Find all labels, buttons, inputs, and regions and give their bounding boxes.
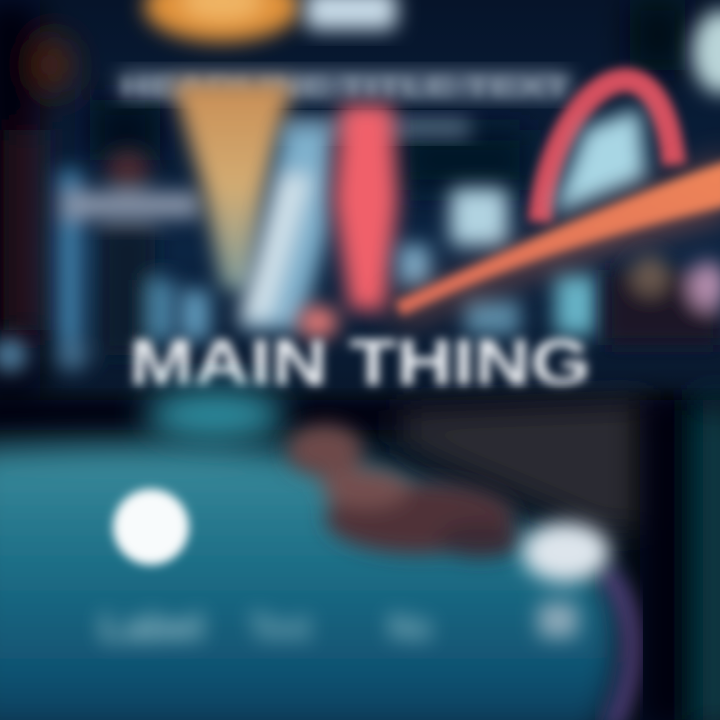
black right column — [640, 400, 720, 720]
blue arch window — [552, 108, 646, 215]
label column 2: Text — [249, 607, 311, 649]
light blue chart shapes — [180, 125, 332, 340]
glowing orange lamp — [144, 0, 300, 42]
left dark column — [0, 0, 685, 400]
orange swoosh — [395, 160, 720, 316]
white cloud patch — [305, 0, 397, 30]
left figures — [0, 150, 200, 373]
pink arc — [540, 80, 674, 222]
subtitle — [280, 118, 470, 138]
right crowd — [605, 255, 720, 345]
white glove blob — [522, 522, 610, 638]
teal glow near center — [145, 389, 285, 441]
icon: white circle — [113, 489, 189, 565]
purple rim of panel — [606, 570, 632, 720]
light blue blocks — [398, 188, 597, 335]
orange swoosh glow — [390, 155, 720, 325]
background: upper scene — [0, 0, 720, 420]
black divider band — [0, 400, 720, 430]
headline text: HEADLINE TITLE TEXT — [120, 71, 570, 102]
headline band — [120, 72, 570, 98]
dim grey wedge behind brown blob — [400, 400, 650, 530]
red pillar — [298, 105, 398, 338]
label column 3: No — [388, 607, 432, 649]
brown blob — [287, 424, 522, 558]
top right pale circle — [692, 10, 720, 94]
main title: MAIN THING — [129, 325, 591, 399]
teal lower panel — [0, 444, 619, 720]
label column 1: Label — [100, 607, 204, 649]
orange funnel — [172, 82, 292, 290]
